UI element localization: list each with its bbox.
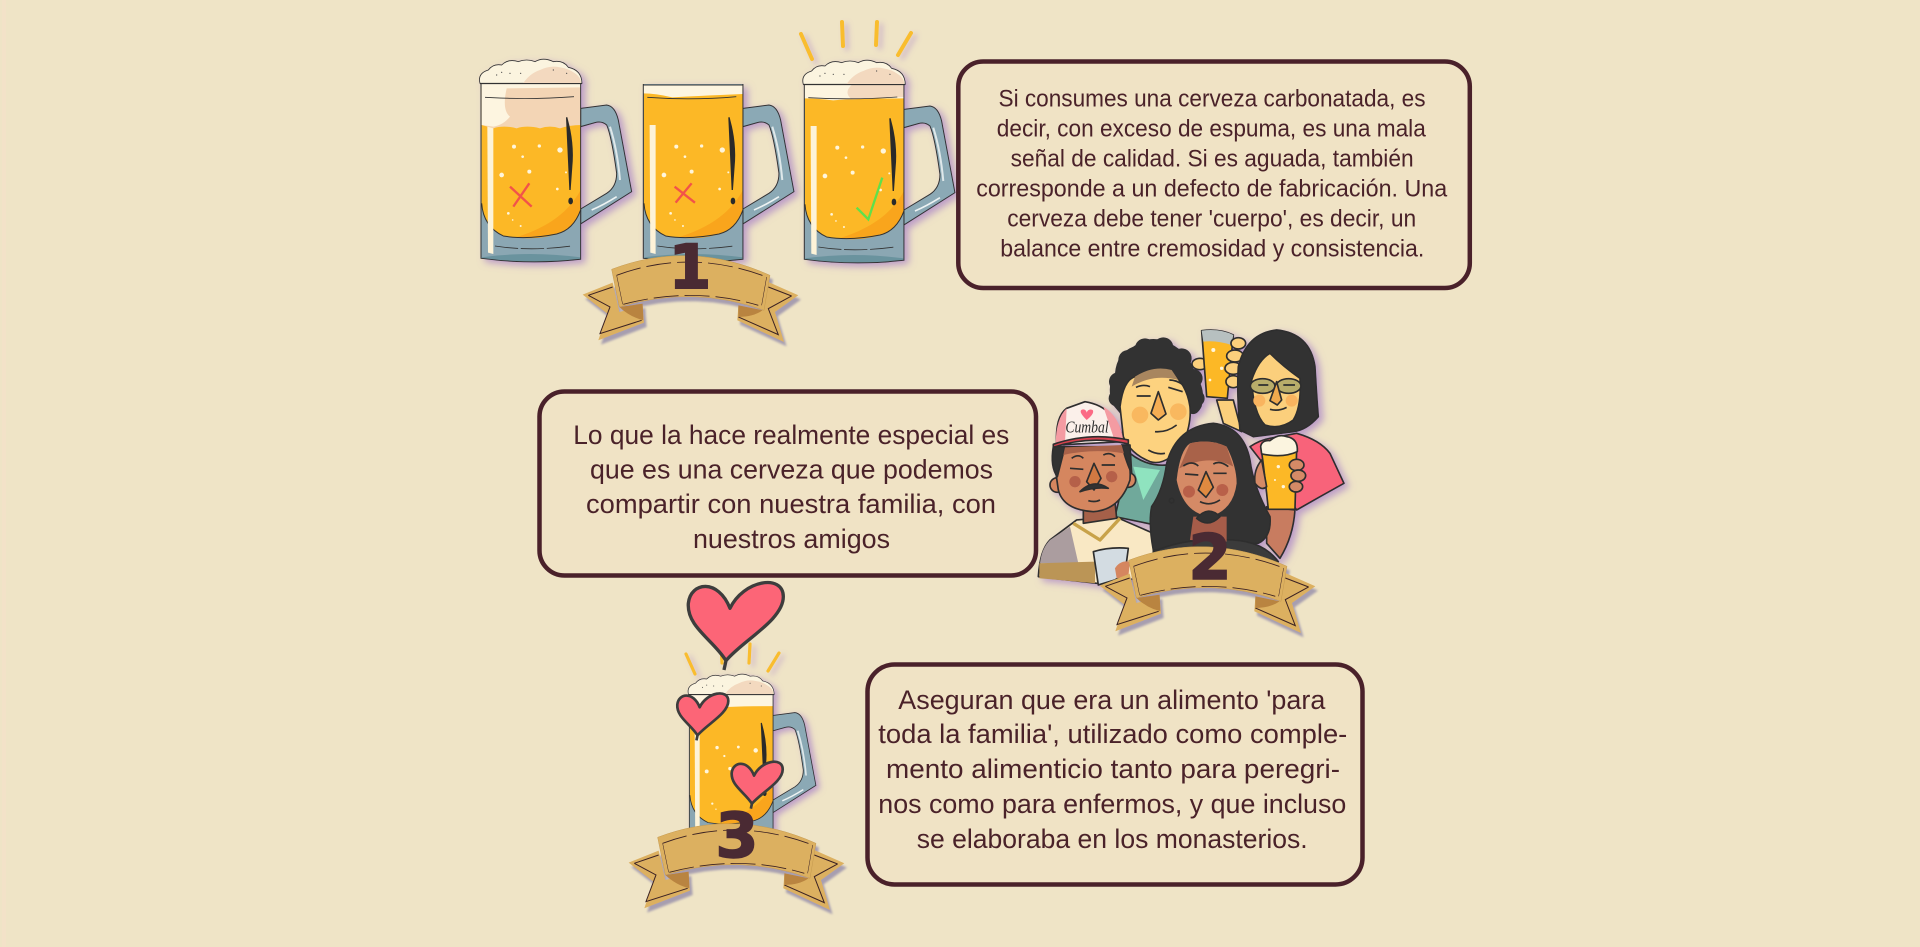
text box 2: nuestros amigos [693,524,890,554]
icon: shine rays [801,22,911,59]
woman with glasses [1238,330,1318,437]
text box 1 [958,62,1470,288]
text box 1: cerveza debe tener 'cuerpo', es decir, un [1007,206,1416,232]
man with cap: Cumbal [1065,418,1109,437]
text box 2 [540,392,1036,576]
text box 2: que es una cerveza que podemos [590,454,993,484]
text box 3: mento alimenticio tanto para peregri- [886,754,1340,784]
mug [688,674,816,844]
man with cap [1038,402,1153,585]
long haired man with beer [1150,423,1306,573]
number 2: 2 [1188,521,1232,594]
text box 2: Lo que la hace realmente especial es [573,420,1009,450]
illustration: four friends toasting [1038,330,1344,585]
raised beer glass [1192,330,1246,432]
text box 3: nos como para enfermos, y que incluso [878,789,1346,819]
curly haired man [1109,337,1205,527]
text box 1: Si consumes una cerveza carbonatada, es [998,86,1426,112]
mug: too much foam, wrong [479,59,632,262]
text box 3 [868,664,1362,884]
banner: number 2 [1100,547,1315,633]
text box 1: señal de calidad. Si es aguada, también [1011,146,1414,172]
text box 1: corresponde a un defecto de fabricación. Una [976,176,1448,202]
text box 3: toda la familia', utilizado como comple- [878,719,1347,749]
banner: number 3 [629,824,844,910]
text box 3: Aseguran que era un alimento 'para [898,685,1326,715]
icon: small heart right [732,762,783,809]
illustration: mug with hearts [677,583,816,844]
text box 1: balance entre cremosidad y consistencia. [1000,236,1424,262]
banner: number 1 [583,256,798,342]
text box 3: se elaboraba en los monasterios. [917,824,1308,854]
number 3: 3 [715,799,759,872]
text box 2: compartir con nuestra familia, con [586,489,996,519]
icon: shine rays [686,644,779,674]
text box 1: decir, con exceso de espuma, es una mala [997,116,1426,142]
icon: big heart [688,583,783,670]
mug: correct with check mark [803,60,955,263]
icon: small heart left [677,693,728,740]
woman's pink shirt [1250,433,1344,510]
mug: watery, wrong [643,84,794,262]
illustration: three beer mugs [479,22,955,263]
number 1: 1 [669,232,711,303]
